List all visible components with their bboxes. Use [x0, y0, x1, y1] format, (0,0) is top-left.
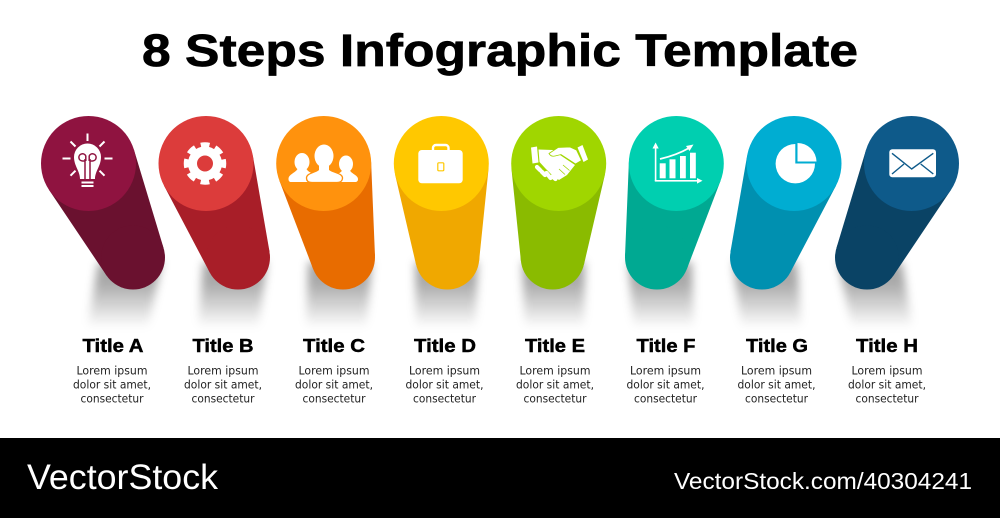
label H: dolor sit amet, [848, 378, 926, 392]
label C: Title C [303, 336, 365, 356]
label F [626, 336, 704, 406]
label D: consectetur [413, 392, 476, 406]
icon: lightbulb [62, 134, 112, 186]
label H: Title H [856, 336, 918, 356]
label D: Lorem ipsum [409, 364, 480, 378]
label G: consectetur [745, 392, 808, 406]
body C [279, 162, 375, 290]
label D: Title D [414, 336, 476, 356]
shadow E [522, 262, 585, 332]
icon: envelope [889, 149, 936, 177]
label B: consectetur [192, 392, 255, 406]
label B: dolor sit amet, [184, 378, 262, 392]
body G [730, 155, 836, 290]
label C: Lorem ipsum [298, 364, 370, 378]
step E cylinder [511, 116, 606, 332]
label F: dolor sit amet, [626, 378, 704, 392]
top C [276, 116, 371, 211]
step A cylinder [41, 116, 165, 332]
top A [41, 116, 136, 211]
label H [848, 336, 926, 406]
label E: Title E [525, 336, 585, 356]
title: 8 Steps Infographic Template [142, 25, 858, 76]
icon: people [288, 144, 358, 182]
label F: consectetur [634, 392, 697, 406]
label A [73, 336, 151, 406]
icon: handshake [531, 145, 588, 180]
label F: Lorem ipsum [630, 364, 701, 378]
label E: consectetur [524, 392, 587, 406]
step F cylinder [625, 116, 724, 332]
label D [406, 336, 484, 406]
label H: Lorem ipsum [852, 364, 922, 378]
label B [184, 336, 262, 406]
icon: gear [186, 145, 224, 182]
body H [835, 150, 951, 290]
body E [511, 168, 605, 290]
label A: Title A [82, 336, 144, 356]
top D [394, 116, 489, 211]
shadow D [415, 262, 478, 332]
shadow C [306, 262, 372, 332]
top B [158, 116, 254, 211]
top H [864, 116, 959, 211]
icon: bar chart [652, 142, 702, 184]
step B cylinder [158, 116, 270, 332]
label A: dolor sit amet, [73, 378, 151, 392]
body D [395, 168, 489, 290]
footer bar [0, 438, 1000, 518]
label A: consectetur [80, 392, 144, 406]
step G cylinder [730, 116, 842, 332]
label F: Title F [636, 336, 696, 356]
body B [164, 155, 270, 290]
label C: dolor sit amet, [295, 378, 373, 392]
step H cylinder [835, 116, 959, 332]
label C: consectetur [302, 392, 366, 406]
label G: Title G [746, 336, 808, 356]
label D: dolor sit amet, [406, 378, 484, 392]
label G: dolor sit amet, [738, 378, 816, 392]
shadow A [87, 262, 162, 332]
shadow F [628, 262, 694, 332]
top G [746, 116, 842, 211]
shadow G [733, 262, 802, 332]
footer url: VectorStock.com/40304241 [674, 468, 972, 494]
label A: Lorem ipsum [76, 364, 148, 378]
icon: briefcase [418, 145, 463, 183]
label C [295, 336, 373, 406]
body F [625, 162, 721, 290]
label B: Lorem ipsum [188, 364, 258, 378]
label B: Title B [192, 336, 254, 356]
shadow H [838, 262, 913, 332]
step C cylinder [276, 116, 375, 332]
label G: Lorem ipsum [741, 364, 812, 378]
step D cylinder [394, 116, 489, 332]
body A [49, 150, 165, 290]
label E: Lorem ipsum [520, 364, 590, 378]
shadow B [198, 262, 267, 332]
top F [629, 116, 724, 211]
footer logo text: VectorStock [27, 458, 219, 497]
icon: pie chart [776, 143, 816, 183]
label H: consectetur [856, 392, 919, 406]
label G [738, 336, 816, 406]
top E [511, 116, 606, 211]
label E [516, 336, 594, 406]
label E: dolor sit amet, [516, 378, 594, 392]
